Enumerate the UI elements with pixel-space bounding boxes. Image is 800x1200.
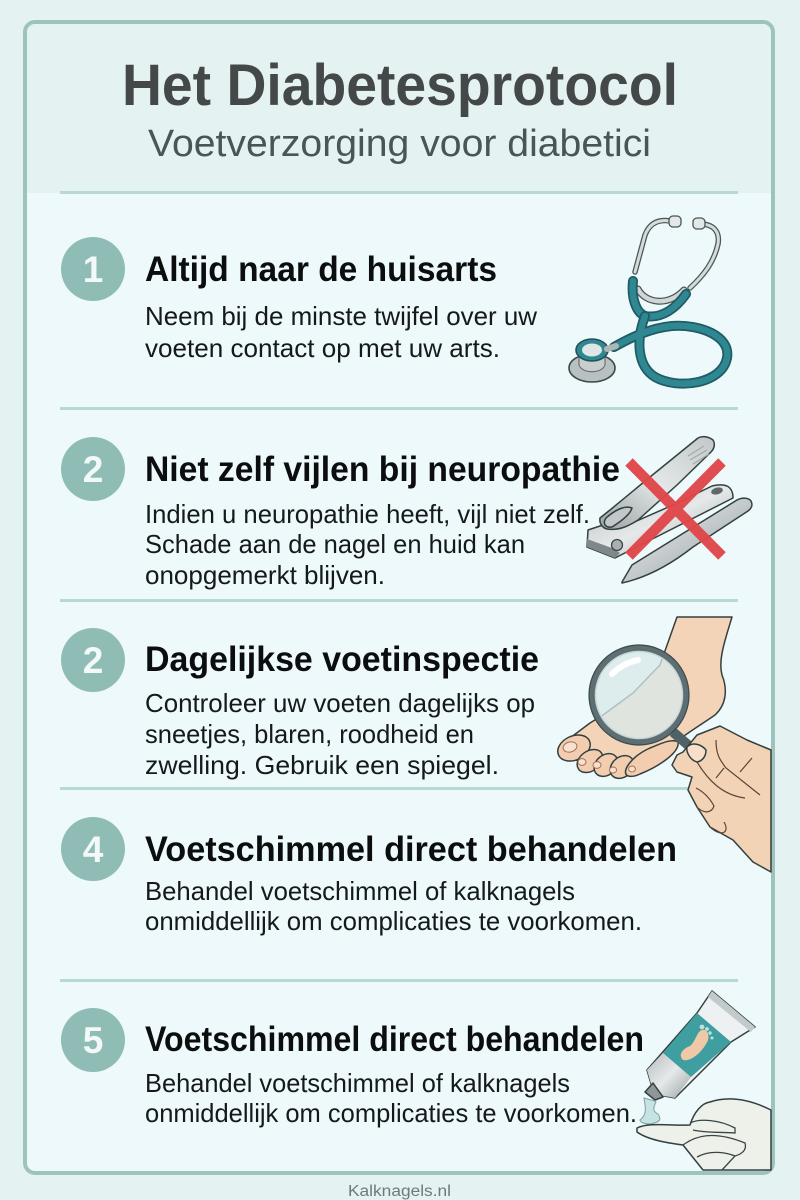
step 5 heading: Voetschimmel direct behandelen	[145, 1020, 644, 1059]
subtitle: Voetverzorging voor diabetici	[148, 123, 651, 165]
step 1 text: Neem bij de minste twijfel over uw	[145, 301, 537, 331]
step 5 text: Behandel voetschimmel of kalknagels	[145, 1068, 570, 1098]
step 3 text: sneetjes, blaren, roodheid en	[145, 719, 474, 749]
step 2	[61, 437, 620, 590]
step 4	[61, 817, 677, 936]
title: Het Diabetesprotocol	[122, 53, 678, 118]
step 2 text: Indien u neuropathie heeft, vijl niet zelf.	[145, 499, 590, 529]
step 5	[61, 1008, 644, 1128]
number badge 1: 1	[83, 249, 103, 290]
step 2 text	[145, 499, 590, 590]
foot	[570, 617, 732, 772]
step 2 heading: Niet zelf vijlen bij neuropathie	[145, 450, 620, 489]
number badge 5	[61, 1008, 125, 1072]
icon: crossed-out nail clippers and file	[587, 437, 752, 583]
number badge 5: 5	[83, 1020, 103, 1061]
hand	[672, 726, 771, 872]
step 1 heading: Altijd naar de huisarts	[145, 250, 497, 289]
number badge 2	[61, 437, 125, 501]
number badge 1	[61, 237, 125, 301]
step 3 heading: Dagelijkse voetinspectie	[145, 640, 539, 679]
step 1 text	[145, 301, 537, 363]
step 1 text: voeten contact op met uw arts.	[145, 333, 500, 363]
number badge 4: 4	[83, 829, 104, 870]
step 4 heading: Voetschimmel direct behandelen	[145, 830, 677, 869]
step 3 text: Controleer uw voeten dagelijks op	[145, 688, 535, 718]
step 3 text: zwelling. Gebruik een spiegel.	[145, 750, 499, 780]
step 5 text: onmiddellijk om complicaties te voorkomen.	[145, 1098, 637, 1128]
icon: foot under magnifying glass held by a hand	[554, 617, 771, 872]
step 2 text: Schade aan de nagel en huid kan	[145, 529, 525, 559]
icon: stethoscope	[569, 216, 727, 384]
step 4 text: Behandel voetschimmel of kalknagels	[145, 876, 575, 906]
step 5 text	[145, 1068, 637, 1128]
step 3	[61, 628, 539, 780]
step 4 text: onmiddellijk om complicaties te voorkomen.	[145, 906, 642, 936]
number badge 4	[61, 817, 125, 881]
red cross	[629, 462, 722, 556]
number badge 2: 2	[83, 449, 103, 490]
magnifying glass	[673, 732, 688, 745]
number badge 3: 2	[83, 640, 103, 681]
step 4 text	[145, 876, 642, 936]
step 2 text: onopgemerkt blijven.	[145, 560, 385, 590]
icon: ointment tube with gloved hand	[637, 991, 771, 1170]
number badge 3	[61, 628, 125, 692]
step 3 text	[145, 688, 535, 780]
step 1	[61, 237, 537, 363]
footer source: Kalknagels.nl	[348, 1183, 451, 1200]
